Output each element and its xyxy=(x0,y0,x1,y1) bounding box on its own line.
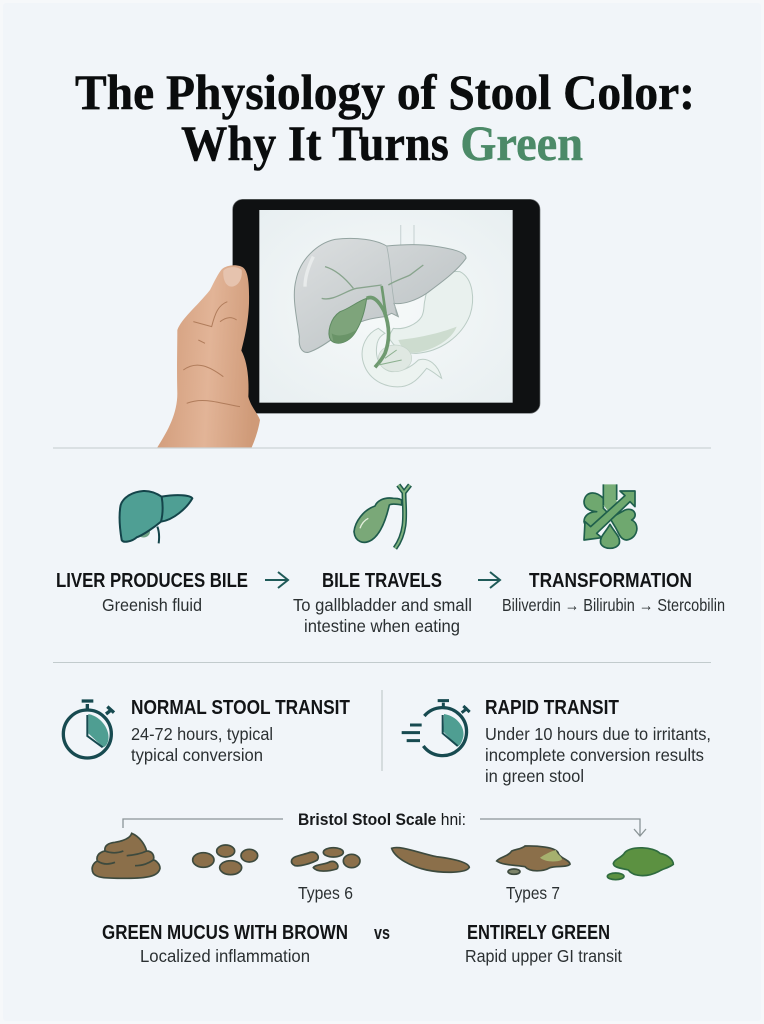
icon: type 1 swirl xyxy=(92,833,160,878)
description: Biliverdin → Bilirubin → Stercobilin xyxy=(502,595,725,615)
icon: fast stopwatch xyxy=(402,701,470,756)
comparison: entirely green: Rapid upper GI transit xyxy=(465,946,622,966)
divider line xyxy=(53,448,711,449)
title: Why It Turns Green xyxy=(181,115,583,171)
heading: LIVER PRODUCES BILE xyxy=(56,569,248,592)
hand xyxy=(157,265,260,447)
comparison: green mucus with brown: Localized inflammation xyxy=(140,946,310,966)
comparison: entirely green xyxy=(465,921,622,966)
tablet screen xyxy=(259,210,513,403)
icon: type 3 clusters xyxy=(291,848,360,871)
description: typical conversion xyxy=(131,745,263,765)
heading: BILE TRAVELS xyxy=(322,569,442,592)
label: types 6: Types 6 xyxy=(298,883,353,903)
title xyxy=(75,64,695,171)
description: intestine when eating xyxy=(304,616,460,636)
icon: gallbladder xyxy=(354,485,410,548)
liver and digestive organs illustration xyxy=(294,225,473,387)
step 2: bile travels xyxy=(293,485,472,636)
panel: normal stool transit xyxy=(63,696,350,765)
icon: type 2 lumps xyxy=(193,845,258,875)
description: Under 10 hours due to irritants, xyxy=(485,724,711,744)
icon: transformation xyxy=(584,484,637,548)
description: incomplete conversion results xyxy=(485,745,704,765)
label: types 7: Types 7 xyxy=(506,883,560,903)
title: The Physiology of Stool Color: xyxy=(75,64,695,120)
icon: type 5 soft blob xyxy=(497,846,570,874)
vs label: vs xyxy=(374,923,390,943)
icon: liver xyxy=(120,491,192,543)
icon: stopwatch xyxy=(63,701,114,758)
bristol scale heading: Bristol Stool Scale hni: xyxy=(298,810,466,829)
icon: type 4 sausage xyxy=(392,848,469,872)
step 1: liver produces bile xyxy=(56,491,248,615)
heading: RAPID TRANSIT xyxy=(485,696,619,719)
tablet held in hand with liver illustration xyxy=(157,199,540,447)
bracket arrow xyxy=(123,819,646,836)
brown stool icons xyxy=(92,833,360,878)
panel: rapid transit xyxy=(402,696,711,786)
divider line xyxy=(53,662,711,663)
thumbnail xyxy=(223,267,242,287)
description: in green stool xyxy=(485,766,584,786)
comparison: green mucus with brown: GREEN MUCUS WITH BROWN xyxy=(102,921,348,944)
comparison: entirely green: ENTIRELY GREEN xyxy=(467,921,610,944)
comparison: green mucus with brown xyxy=(102,921,348,966)
soft stool icons xyxy=(392,846,673,880)
heading: NORMAL STOOL TRANSIT xyxy=(131,696,350,719)
description: To gallbladder and small xyxy=(293,595,472,615)
tablet body xyxy=(233,199,540,413)
arrow xyxy=(265,572,288,588)
vertical divider xyxy=(382,690,383,771)
icon: type 7 green blob xyxy=(607,848,673,880)
heading: TRANSFORMATION xyxy=(529,569,692,592)
description xyxy=(131,724,273,765)
description xyxy=(485,724,711,786)
step 3: transformation xyxy=(502,484,725,615)
description: Greenish fluid xyxy=(102,595,202,615)
description xyxy=(293,595,472,636)
description: 24-72 hours, typical xyxy=(131,724,273,744)
arrow xyxy=(478,572,500,588)
